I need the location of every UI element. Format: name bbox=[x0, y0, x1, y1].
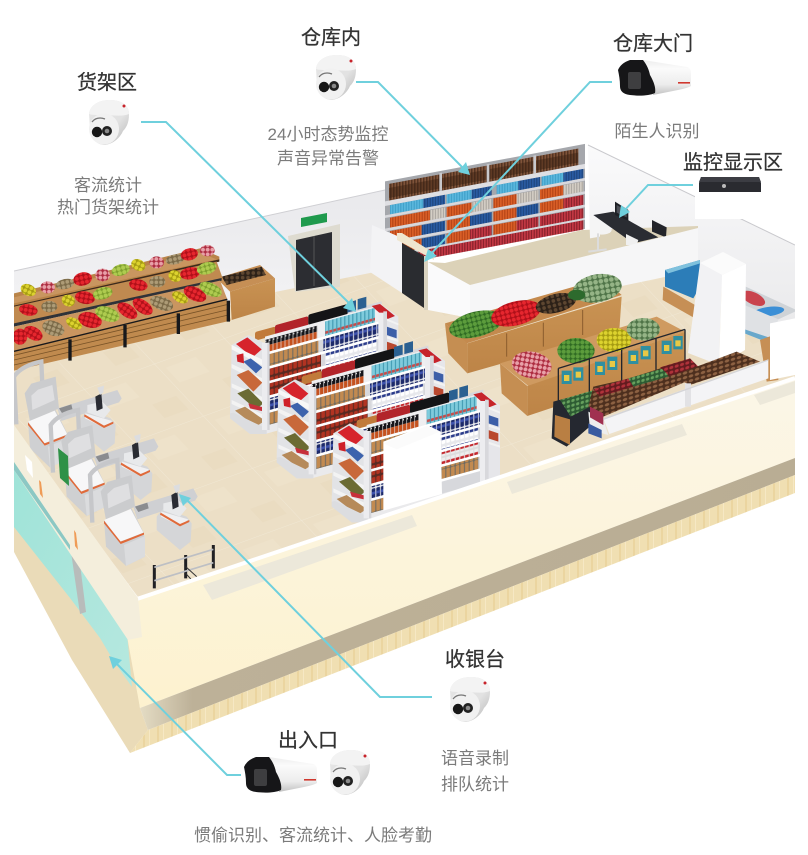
store scene bbox=[13, 144, 795, 753]
left wall strip bbox=[14, 425, 142, 640]
glass front bbox=[14, 465, 132, 687]
icon: NVR recorder bbox=[699, 177, 761, 192]
white pillar bbox=[383, 425, 442, 511]
wall slots bbox=[203, 515, 417, 600]
gondola shelves bbox=[230, 293, 500, 525]
description: 陌生人识别 bbox=[614, 122, 700, 141]
wood base bbox=[130, 475, 795, 753]
low fridge bbox=[552, 396, 590, 447]
label: checkout bbox=[441, 648, 509, 794]
icon: bullet camera bbox=[244, 757, 317, 793]
label: display area bbox=[683, 151, 783, 192]
fish tank and fridge bbox=[663, 260, 795, 343]
icon: dome camera bbox=[450, 677, 490, 722]
heading: 货架区 bbox=[77, 71, 137, 94]
table B bbox=[500, 317, 685, 386]
checkout counters bbox=[14, 362, 213, 588]
shelf unit 2 bbox=[277, 337, 445, 481]
counter top bbox=[14, 362, 122, 468]
poster stands bbox=[558, 329, 685, 402]
back door with exit sign bbox=[288, 213, 340, 292]
description: 语音录制 bbox=[441, 749, 509, 768]
line: display area bbox=[623, 185, 693, 212]
monitor desk bbox=[588, 202, 667, 252]
counter front bbox=[90, 460, 198, 566]
label: warehouse door bbox=[613, 32, 700, 141]
heading: 收银台 bbox=[445, 648, 505, 671]
line: warehouse door bbox=[429, 82, 612, 256]
icon: dome camera bbox=[316, 55, 356, 100]
heading: 仓库内 bbox=[301, 26, 361, 49]
produce displays bbox=[445, 270, 795, 447]
warehouse shelves bbox=[385, 144, 585, 267]
label: shelf zone bbox=[57, 71, 159, 217]
icon: dome camera bbox=[330, 750, 370, 795]
icon: bullet camera bbox=[618, 60, 691, 96]
barrier bbox=[154, 545, 213, 588]
table A bbox=[445, 286, 622, 344]
line: entrance bbox=[113, 660, 241, 775]
icon: dome camera bbox=[89, 100, 129, 145]
description: 客流统计 bbox=[74, 176, 142, 195]
description: 24小时态势监控 bbox=[268, 125, 388, 144]
warehouse room bbox=[370, 144, 698, 318]
fruit shelves left bbox=[13, 245, 275, 371]
arrow heads bbox=[109, 162, 630, 669]
shelf unit 3 bbox=[332, 381, 500, 525]
heading: 监控显示区 bbox=[683, 151, 783, 174]
heading: 仓库大门 bbox=[613, 32, 693, 55]
exterior left floor and glass bbox=[14, 460, 148, 753]
warehouse walls and door bbox=[371, 230, 402, 293]
right wall bbox=[589, 179, 795, 322]
warehouse floor bbox=[428, 226, 698, 288]
description: 惯偷识别、客流统计、人脸考勤 bbox=[194, 826, 432, 845]
line: shelves bbox=[141, 122, 352, 306]
floor bbox=[14, 268, 795, 600]
front wall and base bbox=[14, 378, 795, 753]
back wall bbox=[14, 190, 385, 306]
gray ledge bbox=[140, 458, 795, 730]
label: warehouse inside bbox=[268, 26, 388, 168]
shelf unit 1 bbox=[230, 293, 398, 437]
label: entrance bbox=[194, 729, 432, 845]
label: shelf zone: 热门货架统计 bbox=[57, 198, 159, 217]
counter middle bbox=[51, 410, 158, 516]
white mask behind display label bbox=[695, 195, 745, 219]
line: warehouse inside bbox=[356, 82, 466, 171]
line: checkout bbox=[186, 499, 432, 697]
label: checkout: 排队统计 bbox=[441, 775, 509, 794]
heading: 出入口 bbox=[278, 729, 338, 752]
white column bbox=[700, 252, 746, 275]
label: warehouse inside: 声音异常告警 bbox=[277, 149, 379, 168]
connector lines bbox=[109, 82, 693, 775]
